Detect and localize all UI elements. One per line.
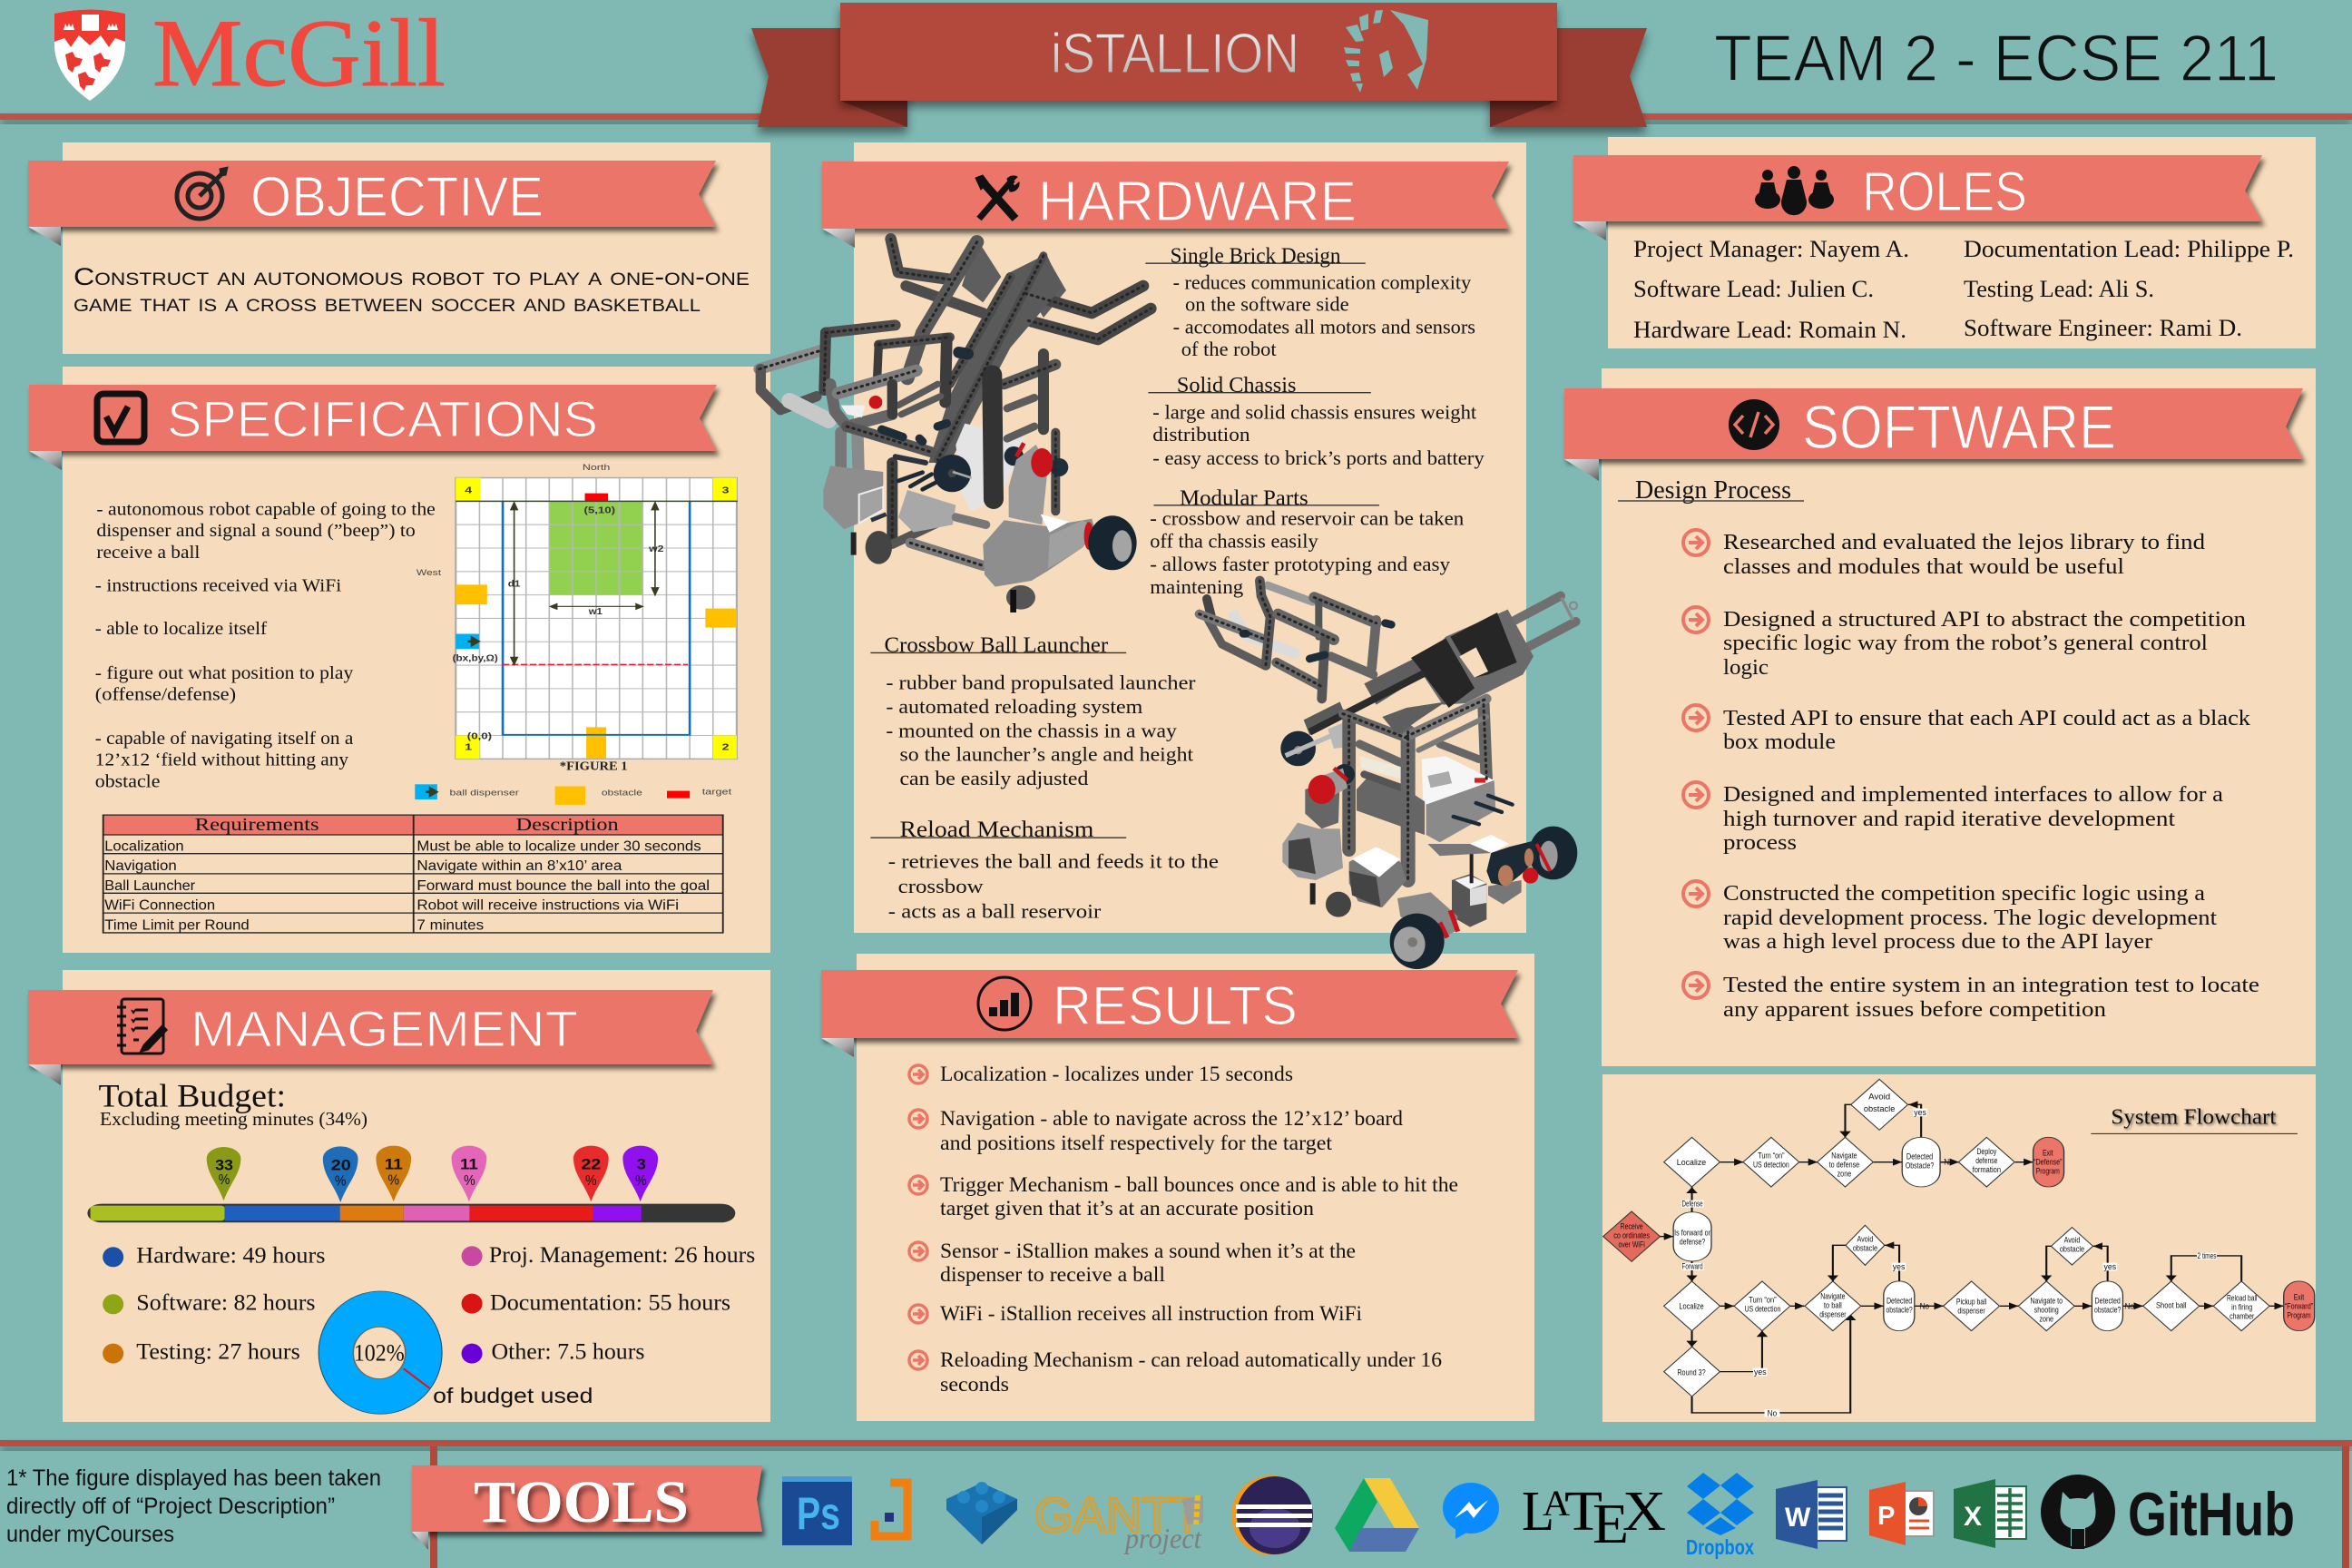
- heading: TOOLS: [474, 1469, 689, 1535]
- zoom4 coordinates: [870, 244, 1485, 923]
- flowchart node labels: formation: [1973, 1165, 2001, 1174]
- role list: Hardware Lead: Romain N.: [1633, 317, 1906, 343]
- icon: eclipse: [1231, 1475, 1313, 1555]
- flowchart connector labels: No: [1944, 1157, 1954, 1167]
- flowchart node labels: Detected: [2095, 1296, 2121, 1306]
- flowchart node labels: “Forward”: [2285, 1301, 2313, 1311]
- direction labels: West: [416, 568, 442, 577]
- flowchart node labels: Exit: [2043, 1148, 2053, 1158]
- icon: latex logo: T: [1564, 1481, 1602, 1543]
- hardware: modular parts: [1150, 486, 1464, 599]
- flowchart node labels: Reload ball: [2227, 1293, 2257, 1303]
- icon: messenger: [1443, 1483, 1499, 1539]
- flowchart connector labels: yes: [1914, 1108, 1926, 1117]
- flowchart node labels: obstacle?: [1886, 1305, 1913, 1315]
- map legend: target: [702, 788, 732, 797]
- field labels: [453, 485, 730, 752]
- heading: SOFTWARE: [1802, 393, 2116, 462]
- percent pins: 3: [637, 1155, 646, 1172]
- flowchart node labels: over WiFi: [1618, 1240, 1645, 1250]
- flowchart node labels: US detection: [1745, 1304, 1780, 1314]
- spec list: (offense/defense): [95, 685, 236, 704]
- spec list: obstacle: [95, 772, 160, 791]
- icon: excel: [1954, 1479, 2026, 1548]
- flowchart connector labels: [1681, 1108, 2217, 1418]
- field labels: (0,0): [467, 731, 492, 741]
- title ribbon: [751, 3, 1647, 127]
- flowchart heading: System Flowchart: [2111, 1104, 2277, 1129]
- subheading: Design Process: [1635, 476, 1791, 505]
- icon: code: [1729, 399, 1779, 450]
- dimension arrows: [511, 503, 659, 664]
- flowchart node labels: obstacle?: [2094, 1305, 2122, 1315]
- flowchart node labels: shooting: [2034, 1305, 2059, 1315]
- flowchart node labels: Is forward or: [1674, 1228, 1710, 1238]
- flowchart node labels: to ball: [1824, 1300, 1842, 1310]
- icon: github: [2041, 1475, 2295, 1549]
- banner: tools: [412, 1465, 762, 1550]
- process list: Constructed the competition specific logic using a: [1723, 882, 2205, 906]
- hardware: modular parts: off tha chassis easily: [1150, 531, 1318, 553]
- flowchart node labels: “Defense”: [2034, 1157, 2063, 1167]
- percent pins: %: [635, 1173, 647, 1189]
- ribbon tails: [751, 28, 1647, 127]
- results list: and positions itself respectively for the target: [940, 1132, 1333, 1154]
- banner: specifications: [29, 385, 717, 470]
- hardware: crossbow ball launcher: - rubber band propulsated launcher: [886, 672, 1196, 694]
- banner: roles: [1573, 155, 2262, 240]
- field labels: 1: [465, 742, 472, 752]
- percent pins: %: [387, 1172, 399, 1188]
- requirements table: Forward must bounce the ball into the goal: [416, 877, 710, 894]
- hardware: solid chassis: Solid Chassis: [1177, 373, 1296, 397]
- icon: google drive: [1335, 1478, 1419, 1552]
- figure credit note: under myCourses: [6, 1522, 174, 1547]
- flowchart drawing: 2 times: [2198, 1251, 2216, 1260]
- results list: Reloading Mechanism - can reload automatically under 16: [940, 1348, 1442, 1371]
- panel: management: [28, 970, 770, 1422]
- heading: HARDWARE: [1038, 171, 1357, 233]
- process list: Researched and evaluated the lejos library to find: [1723, 531, 2205, 554]
- flowchart node labels: [1613, 1092, 2313, 1377]
- budget legend: Documentation: 55 hours: [490, 1290, 730, 1316]
- icon: gantt project: GANTT: [1034, 1488, 1202, 1543]
- wordmark: McGill: [152, 0, 446, 106]
- icon: latex logo: [1522, 1481, 1666, 1555]
- icon: latex logo: L: [1522, 1481, 1554, 1543]
- hardware: solid chassis: - large and solid chassis ensures weight: [1152, 402, 1477, 424]
- percent pins: [207, 1146, 658, 1202]
- budget heading: Total Budget:: [98, 1078, 286, 1114]
- flowchart node labels: Navigate: [1820, 1291, 1846, 1301]
- panel: software: [1564, 368, 2316, 1066]
- spec list: [95, 499, 436, 791]
- ribbon folds: [840, 101, 1557, 127]
- field labels: 2: [722, 742, 730, 752]
- flowchart node labels: Turn “on”: [1758, 1151, 1785, 1161]
- icon: latex logo: A: [1543, 1483, 1570, 1524]
- hardware: solid chassis: [1148, 373, 1485, 469]
- percent pins: %: [585, 1173, 597, 1189]
- heading: MANAGEMENT: [191, 1000, 578, 1057]
- requirements table: Localization: [104, 838, 184, 854]
- requirements table: Description: [516, 815, 619, 835]
- results list: target given that it’s at an accurate position: [940, 1197, 1315, 1220]
- robot render 1: [760, 239, 1151, 612]
- flowchart node labels: Avoid: [1868, 1092, 1890, 1102]
- process list: Designed and implemented interfaces to allow for a: [1723, 783, 2223, 807]
- flowchart node labels: co ordinates: [1613, 1230, 1650, 1240]
- icon: excel: X: [1964, 1502, 1982, 1532]
- budget heading: Excluding meeting minutes (34%): [100, 1109, 368, 1130]
- percent pins: %: [464, 1173, 475, 1189]
- stacked progress bar: [87, 1204, 735, 1222]
- figure credit note: [6, 1465, 381, 1547]
- requirements table: Navigation: [104, 858, 177, 874]
- flowchart node labels: defense: [1975, 1156, 1998, 1165]
- figure credit note: directly off of “Project Description”: [6, 1494, 335, 1519]
- icon: bar chart: [978, 977, 1031, 1030]
- percent pins: 20: [331, 1156, 351, 1173]
- process bullets: [1683, 530, 1709, 998]
- hardware: reload mechanism: - acts as a ball reservoir: [888, 901, 1101, 923]
- flowchart node labels: obstacle: [2060, 1244, 2084, 1254]
- flowchart node labels: Shoot ball: [2156, 1300, 2187, 1310]
- heading: RESULTS: [1053, 975, 1298, 1036]
- field labels: (5,10): [583, 505, 615, 515]
- figure 1: field map: [416, 463, 738, 759]
- spec list: - figure out what position to play: [95, 663, 354, 683]
- icon: lego brick: [946, 1482, 1017, 1544]
- figure caption: *FIGURE 1: [560, 760, 628, 773]
- spec list: - instructions received via WiFi: [95, 576, 341, 595]
- play area: [503, 501, 690, 735]
- objective text: [74, 263, 750, 317]
- icon: dropbox: Dropbox: [1686, 1535, 1754, 1559]
- results list: WiFi - iStallion receives all instruction from WiFi: [940, 1302, 1362, 1325]
- hardware: single brick design: on the software side: [1185, 294, 1349, 316]
- McGill logo: [54, 0, 446, 106]
- map legend: obstacle: [602, 788, 642, 798]
- role list: Software Engineer: Rami D.: [1964, 315, 2242, 341]
- icon: github: GitHub: [2128, 1480, 2295, 1549]
- results bullets: [909, 1065, 927, 1369]
- role list: Testing Lead: Ali S.: [1964, 276, 2154, 302]
- flowchart node labels: Navigate: [1831, 1151, 1857, 1161]
- requirements table: [103, 815, 723, 933]
- budget donut: [318, 1291, 593, 1414]
- process list: high turnover and rapid iterative development: [1723, 808, 2175, 831]
- budget legend: Proj. Management: 26 hours: [489, 1242, 755, 1268]
- hardware: crossbow ball launcher: can be easily adjusted: [899, 768, 1089, 790]
- panel: specifications: [29, 367, 770, 953]
- banner: hardware: [822, 162, 1509, 248]
- ball dispenser: [456, 634, 479, 649]
- icon: powerpoint: P: [1877, 1502, 1895, 1531]
- results list: Trigger Mechanism - ball bounces once and is able to hit the: [940, 1173, 1458, 1196]
- results list: dispenser to receive a ball: [940, 1263, 1165, 1286]
- zoom3 coordinates: [87, 1078, 755, 1414]
- banner: management: [28, 990, 713, 1085]
- flowchart node labels: Localize: [1677, 1158, 1707, 1167]
- ribbon body: [840, 3, 1557, 101]
- process list: Tested API to ensure that each API could act as a black: [1723, 707, 2250, 730]
- flowchart node labels: dispenser: [1819, 1309, 1847, 1319]
- results list: seconds: [940, 1373, 1009, 1396]
- requirements table: Time Limit per Round: [104, 917, 250, 933]
- flowchart connectors: [1660, 1104, 2284, 1413]
- percent pins: %: [219, 1172, 230, 1188]
- percent pins: 33: [215, 1156, 233, 1173]
- hardware: crossbow ball launcher: - mounted on the chassis in a way: [886, 720, 1177, 742]
- icon: horse: [1344, 10, 1428, 93]
- hardware: modular parts: - allows faster prototyping and easy: [1150, 554, 1450, 576]
- hardware: single brick design: Single Brick Design: [1171, 244, 1341, 268]
- icon: bracket: [875, 1483, 907, 1536]
- zoom2 coordinates: [95, 463, 738, 933]
- budget legend: Software: 82 hours: [136, 1290, 315, 1316]
- hardware: reload mechanism: - retrieves the ball and feeds it to the: [888, 850, 1219, 873]
- flowchart node labels: defense?: [1680, 1237, 1705, 1247]
- role list: Documentation Lead: Philippe P.: [1964, 236, 2294, 262]
- results list: Localization - localizes under 15 seconds: [940, 1063, 1293, 1085]
- process list: box module: [1723, 730, 1836, 754]
- flowchart node labels: in firing: [2231, 1302, 2252, 1312]
- icon: checkbox: [97, 394, 144, 442]
- panel: results: [821, 954, 1534, 1421]
- flowchart node labels: Detected: [1906, 1152, 1933, 1161]
- field labels: 4: [465, 485, 472, 495]
- icon: word: [1776, 1480, 1847, 1549]
- icon: photoshop: Ps: [797, 1488, 840, 1539]
- flowchart node labels: Program: [2287, 1310, 2311, 1320]
- hardware: crossbow ball launcher: - automated reloading system: [886, 696, 1142, 719]
- hardware: single brick design: - accomodates all motors and sensors: [1173, 317, 1475, 338]
- hardware: solid chassis: - easy access to brick’s ports and battery: [1152, 447, 1485, 469]
- flowchart connector labels: No: [1768, 1408, 1777, 1418]
- requirements table: WiFi Connection: [104, 897, 215, 914]
- hardware: crossbow ball launcher: so the launcher’s angle and height: [899, 744, 1194, 766]
- hardware: single brick design: - reduces communication complexity: [1173, 271, 1471, 294]
- field labels: (bx,by,Ω): [453, 653, 498, 663]
- process list: classes and modules that would be useful: [1723, 555, 2124, 579]
- budget donut: 102%: [354, 1339, 405, 1366]
- budget donut: of budget used: [433, 1384, 593, 1407]
- hardware: reload mechanism: crossbow: [898, 876, 984, 898]
- process list: Tested the entire system in an integration test to locate: [1723, 974, 2259, 997]
- project name: iSTALLION: [1051, 23, 1299, 85]
- role list: Software Lead: Julien C.: [1633, 276, 1874, 302]
- requirements table: 7 minutes: [416, 917, 484, 933]
- spec list: receive a ball: [96, 543, 200, 563]
- map legend: [415, 784, 732, 805]
- flowchart node labels: Receive: [1621, 1221, 1643, 1231]
- budget legend: Hardware: 49 hours: [136, 1243, 325, 1269]
- flowchart node labels: Avoid: [1857, 1234, 1873, 1244]
- flowchart nodes: [1603, 1079, 2315, 1396]
- spec list: dispenser and signal a sound (”beep”) to: [96, 521, 416, 541]
- flowchart node labels: dispenser: [1957, 1306, 1985, 1316]
- percent pins: 22: [581, 1155, 601, 1172]
- team title: TEAM 2 - ECSE 211: [1714, 23, 2278, 95]
- flowchart node labels: Detected: [1886, 1296, 1912, 1306]
- objective text: Construct an autonomous robot to play a one-on-one: [74, 263, 750, 290]
- heading: ROLES: [1862, 161, 2027, 222]
- requirements table: Navigate within an 8’x10’ area: [416, 858, 622, 874]
- process list: rapid development process. The logic development: [1723, 906, 2217, 930]
- icon: gantt project: project: [1123, 1522, 1202, 1554]
- flowchart node labels: zone: [2039, 1314, 2053, 1324]
- map legend: ball dispenser: [449, 788, 519, 798]
- hardware: crossbow ball launcher: Crossbow Ball Launcher: [885, 633, 1109, 657]
- banner: objective: [28, 161, 716, 246]
- budget legend: Testing: 27 hours: [136, 1339, 300, 1365]
- icon: team: [1755, 166, 1834, 215]
- flowchart node labels: Program: [2036, 1166, 2060, 1176]
- hardware: modular parts: maintening: [1150, 576, 1243, 599]
- shield: [54, 9, 125, 101]
- requirements table: Ball Launcher: [104, 877, 195, 894]
- process list: was a high level process due to the API layer: [1723, 930, 2152, 954]
- flowchart node labels: Navigate to: [2030, 1296, 2063, 1306]
- panel: roles: [1573, 137, 2316, 348]
- process list: logic: [1723, 656, 1769, 680]
- hardware: reload mechanism: [870, 817, 1219, 923]
- flowchart node labels: Exit: [2294, 1292, 2305, 1302]
- flowchart connector labels: No: [1920, 1301, 1929, 1311]
- icon: powerpoint: [1869, 1482, 1934, 1545]
- header rule: [0, 113, 2352, 120]
- flowchart connector labels: Defense: [1682, 1199, 1703, 1209]
- icon: word: W: [1785, 1503, 1811, 1533]
- percent pins: 11: [460, 1155, 478, 1172]
- direction labels: North: [583, 463, 610, 472]
- results list: Navigation - able to navigate across the 12’x12’ board: [940, 1107, 1404, 1130]
- percent pins: %: [335, 1174, 346, 1189]
- requirements table: Requirements: [195, 815, 319, 835]
- icon: notebook: [117, 999, 166, 1054]
- requirements table: Robot will receive instructions via WiFi: [416, 897, 679, 914]
- banner: software: [1564, 388, 2303, 481]
- role list: [1633, 236, 2294, 343]
- flowchart node labels: US detection: [1753, 1160, 1789, 1170]
- footer: [0, 1440, 2352, 1568]
- direction labels: [416, 463, 610, 577]
- process list: Designed a structured API to abstract the competition: [1723, 608, 2246, 632]
- process list: process: [1723, 831, 1797, 855]
- icon: dropbox: [1686, 1473, 1754, 1559]
- flowchart node labels: obstacle: [1853, 1243, 1877, 1253]
- percent pins: 11: [385, 1155, 403, 1172]
- heading: SPECIFICATIONS: [167, 390, 598, 447]
- header: [0, 0, 2352, 127]
- icon: tools: [975, 175, 1019, 219]
- flowchart node labels: Pickup ball: [1956, 1297, 1986, 1307]
- process list: [1723, 531, 2259, 1022]
- flowchart connector labels: yes: [1754, 1367, 1767, 1377]
- field labels: d1: [508, 579, 521, 589]
- icon: photoshop: [782, 1476, 852, 1545]
- budget legend: Other: 7.5 hours: [491, 1339, 644, 1365]
- field labels: w2: [648, 544, 664, 554]
- budget legend: [103, 1242, 755, 1365]
- objective text: game that is a cross between soccer and basketball: [74, 289, 701, 317]
- spec list: - able to localize itself: [95, 619, 268, 639]
- spec list: - capable of navigating itself on a: [95, 729, 353, 749]
- hardware: reload mechanism: Reload Mechanism: [899, 817, 1094, 842]
- corner markers: [456, 478, 737, 759]
- panel: hardware: [822, 142, 1526, 933]
- spec list: 12’x12 ‘field without hitting any: [95, 750, 348, 769]
- spec list: - autonomous robot capable of going to the: [96, 499, 436, 519]
- icon: latex logo: X: [1622, 1481, 1666, 1543]
- flowchart drawing: [1603, 1079, 2315, 1418]
- panel: system flowchart: [1602, 1074, 2316, 1422]
- flowchart node labels: to defense: [1829, 1160, 1859, 1170]
- process list: any apparent issues before competition: [1723, 998, 2106, 1022]
- flowchart connector labels: yes: [2104, 1262, 2116, 1271]
- results list: [940, 1063, 1458, 1396]
- hardware: crossbow ball launcher: [870, 633, 1196, 790]
- target: [585, 494, 608, 501]
- flowchart node labels: zone: [1838, 1169, 1852, 1179]
- hardware: solid chassis: distribution: [1152, 424, 1250, 446]
- panel: objective: [28, 142, 770, 354]
- flowchart connector labels: yes: [1893, 1262, 1905, 1271]
- flowchart node labels: chamber: [2230, 1311, 2254, 1321]
- banner: results: [821, 970, 1518, 1057]
- heading: OBJECTIVE: [250, 166, 544, 229]
- flowchart connector labels: Forward: [1682, 1261, 1703, 1271]
- flowchart node labels: obstacle: [1864, 1104, 1896, 1113]
- footer rules: [0, 1440, 2352, 1446]
- budget heading: [98, 1078, 368, 1130]
- hardware: single brick design: of the robot: [1181, 338, 1277, 361]
- flowchart node labels: Obstacle?: [1906, 1161, 1935, 1171]
- field labels: w1: [588, 606, 603, 616]
- flowchart node labels: Deploy: [1976, 1147, 1996, 1156]
- flowchart node labels: Avoid: [2064, 1235, 2080, 1245]
- process list: specific logic way from the robot’s general control: [1723, 632, 2208, 655]
- robot render 2: [1200, 581, 1577, 969]
- flowchart node labels: Round 3?: [1677, 1367, 1706, 1377]
- hardware: modular parts: - crossbow and reservoir can be taken: [1150, 508, 1464, 530]
- hardware: modular parts: Modular Parts: [1180, 486, 1308, 510]
- results list: Sensor - iStallion makes a sound when it’s at the: [940, 1240, 1356, 1262]
- hardware: single brick design: [1145, 244, 1475, 361]
- footer dividers: [434, 1446, 2346, 1568]
- role list: Project Manager: Nayem A.: [1633, 236, 1909, 262]
- obstacles: [456, 584, 737, 759]
- flowchart connector labels: No: [2125, 1301, 2134, 1311]
- flowchart node labels: Turn “on”: [1749, 1295, 1777, 1305]
- icon: latex logo: E: [1592, 1494, 1629, 1555]
- icon: target: [177, 167, 228, 219]
- requirements table: Must be able to localize under 30 seconds: [416, 838, 701, 854]
- field labels: 3: [722, 485, 730, 495]
- figure credit note: 1* The figure displayed has been taken: [6, 1465, 381, 1491]
- flowchart node labels: Localize: [1679, 1301, 1704, 1311]
